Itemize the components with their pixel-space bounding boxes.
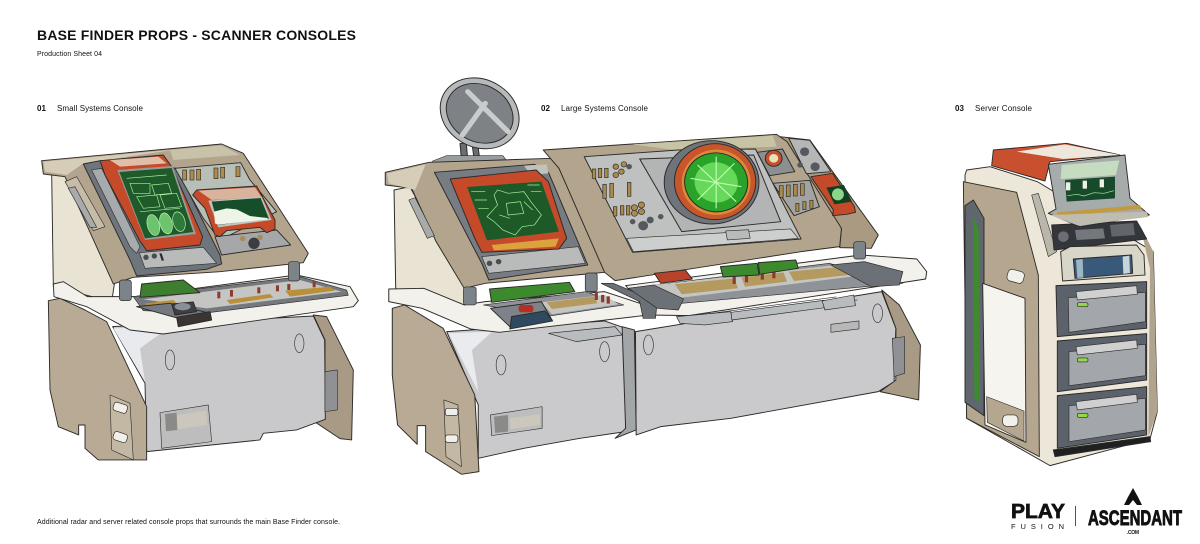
right lower control plate [215, 230, 291, 255]
red top housing [992, 143, 1120, 181]
console 02: large systems console [385, 63, 927, 474]
left screen bay [83, 161, 222, 276]
logo: Ascendant [1088, 488, 1182, 536]
gray desk straps [601, 262, 903, 318]
blue cylinder bay [1061, 245, 1145, 281]
tan hood [42, 144, 308, 284]
drawer 3 [1057, 387, 1147, 448]
black machinery bay [1052, 221, 1147, 250]
cream side panel [52, 173, 115, 302]
left screen bay [434, 164, 588, 280]
lower right tan leg [880, 290, 920, 400]
main hood [543, 134, 878, 281]
label: 03 server console: 03 [955, 104, 964, 113]
bottom strip of central panel [627, 229, 798, 252]
dark round knobs [626, 164, 664, 230]
white side door [983, 268, 1026, 442]
left hood [385, 158, 608, 288]
bottom black bar [1053, 437, 1151, 457]
desk pipes [548, 295, 855, 342]
red buttons and green boards [654, 260, 798, 283]
right panel with switches [175, 163, 277, 240]
footer note: Additional radar and server related console props that surrounds the main Base Finder console. [37, 519, 340, 526]
left green board [489, 282, 575, 302]
left desk inset [484, 292, 624, 317]
drawer 2 [1057, 334, 1147, 392]
logo divider [1075, 506, 1076, 526]
left red screen frame [450, 170, 567, 252]
left green map screen [467, 182, 559, 240]
dark slot [965, 200, 984, 416]
label: 03 server console: Server Console [975, 104, 1033, 113]
right red screen frame [193, 186, 275, 237]
left green screen [119, 168, 193, 238]
console 01: small systems console [42, 144, 358, 460]
green strip [973, 215, 980, 402]
drawer 1 [1056, 282, 1147, 337]
label: 01 small systems console: Small Systems Console [57, 104, 144, 113]
gauge panel [757, 149, 795, 176]
subtitle: Production Sheet 04 [37, 51, 102, 58]
logo: PlayFusion: FUSION [1011, 522, 1064, 531]
center junction seam [615, 327, 636, 438]
satellite dish [426, 63, 534, 167]
green circuit board [140, 280, 200, 297]
left tan block [392, 305, 479, 474]
logo: Ascendant: .COM [1127, 530, 1139, 536]
lower left tan block [48, 298, 147, 460]
tan side panel [963, 182, 1039, 457]
lower right tan leg [313, 315, 353, 440]
title: BASE FINDER PROPS - SCANNER CONSOLES [37, 27, 356, 43]
desk module with red button [491, 302, 553, 329]
lower gray front panel [113, 316, 337, 452]
right body edge [1140, 225, 1157, 437]
cream side panel [394, 187, 466, 308]
label: 02 large systems console: 02 [541, 104, 550, 113]
hinges [464, 242, 866, 305]
radar panel [640, 155, 781, 232]
switch clusters [592, 162, 645, 216]
console 03: server console [963, 143, 1157, 466]
side bracket [1032, 193, 1057, 257]
left white desk [389, 288, 645, 332]
logo: PlayFusion [1011, 501, 1066, 531]
cream body [965, 167, 1157, 466]
far right knob panel [789, 138, 831, 174]
central control panel [584, 149, 801, 252]
left lower gray panel [447, 321, 626, 458]
desk inset controls [133, 277, 348, 313]
white desk surface [53, 275, 358, 334]
left red screen frame [100, 155, 203, 251]
desk module with port [137, 302, 212, 327]
right waveform screen [208, 197, 272, 227]
upper screen unit [1048, 155, 1149, 227]
radar scope [664, 141, 759, 224]
small red screen [811, 173, 855, 216]
right switch panel [773, 180, 819, 216]
label: 01 small systems console: 01 [37, 104, 46, 113]
right desk inset keyboard [628, 263, 903, 303]
hinges [119, 262, 300, 301]
right white desk [626, 255, 927, 316]
label: 02 large systems console: Large Systems Console [561, 104, 649, 113]
logo: PlayFusion: PLAY [1011, 501, 1066, 523]
right lower gray panel [635, 292, 905, 435]
